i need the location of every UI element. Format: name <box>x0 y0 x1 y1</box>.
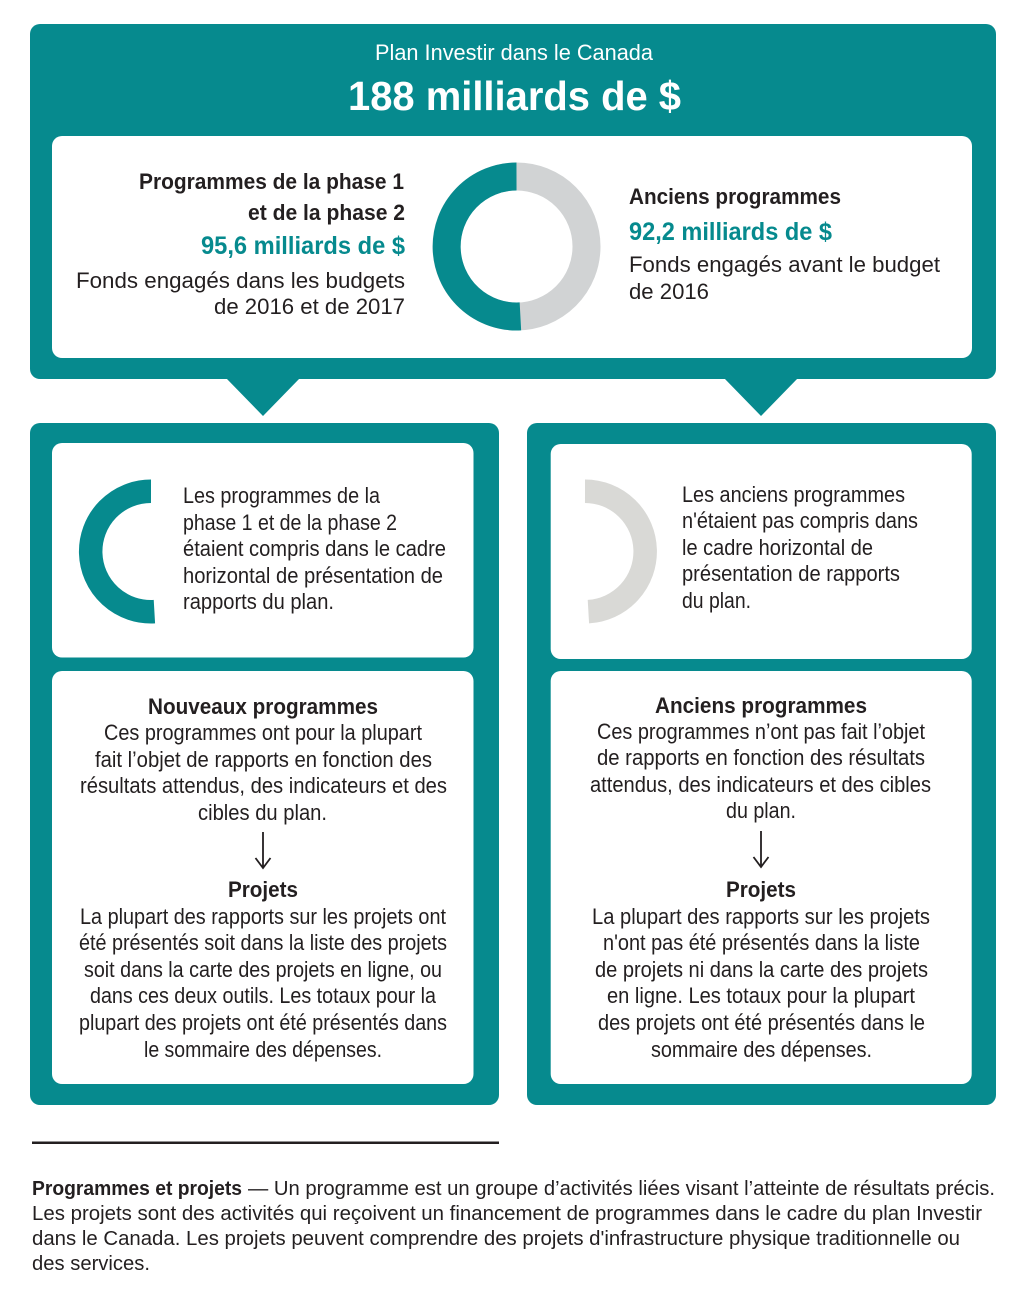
text: framework note <box>682 482 918 613</box>
text: framework note: étaient compris dans le cadre <box>183 536 446 561</box>
text: projects: La plupart des rapports sur les projets <box>592 904 930 929</box>
text: legacy funding <box>629 184 940 304</box>
text: projects: La plupart des rapports sur les projets ont <box>80 904 447 929</box>
text: framework note: phase 1 et de la phase 2 <box>183 510 397 535</box>
panel: new programs <box>30 423 499 1105</box>
text: framework note: le cadre horizontal de <box>682 535 873 560</box>
text: legacy funding: Anciens programmes <box>629 184 841 209</box>
text: legacy programs: attendus, des indicateurs et des cibles <box>590 772 931 797</box>
footnote: des services. <box>32 1252 150 1275</box>
text: legacy funding: de 2016 <box>629 279 709 304</box>
text: legacy funding: Fonds engagés avant le budget <box>629 252 940 277</box>
card: legacy programs reporting <box>551 671 972 1084</box>
arrow: down <box>256 832 270 868</box>
card: horizontal framework, legacy programs <box>551 444 972 659</box>
text: phase 1 and 2 funding: 95,6 milliards de $ <box>201 232 405 260</box>
text: phase 1 and 2 funding: et de la phase 2 <box>248 200 405 225</box>
text: legacy programs: du plan. <box>726 798 796 823</box>
text: framework note: présentation de rapports <box>682 561 900 586</box>
text: phase 1 and 2 funding <box>76 169 405 319</box>
text: phase 1 and 2 funding: de 2016 et de 2017 <box>214 294 405 319</box>
arrow: down <box>754 831 768 867</box>
text: projects: n'ont pas été présentés dans la liste <box>603 930 920 955</box>
text: legacy programs: Anciens programmes <box>655 693 867 718</box>
subtitle: Plan Investir dans le Canada <box>375 40 654 65</box>
text: phase 1 and 2 funding: Fonds engagés dans les budgets <box>76 268 405 293</box>
text: projects: Projets <box>228 877 298 902</box>
text: framework note: du plan. <box>682 588 751 613</box>
card: horizontal framework, new programs <box>52 443 474 658</box>
text: projects: soit dans la carte des projets en ligne, ou <box>84 957 442 982</box>
text: projects: Projets <box>726 877 796 902</box>
text: projects: plupart des projets ont été présentés dans <box>79 1010 447 1035</box>
panel: legacy programs <box>527 423 996 1105</box>
icon: teal half ring <box>91 491 154 612</box>
text: projects <box>592 877 930 1062</box>
text: framework note: rapports du plan. <box>183 589 334 614</box>
text: projects: dans ces deux outils. Les totaux pour la <box>90 983 436 1008</box>
icon: grey half ring <box>585 491 645 612</box>
text: legacy programs: de rapports en fonction des résultats <box>597 745 925 770</box>
card: new programs reporting <box>52 671 474 1084</box>
text: new programs: cibles du plan. <box>198 800 327 825</box>
donut chart <box>446 176 586 316</box>
panel: plan total <box>30 24 996 416</box>
text: projects: le sommaire des dépenses. <box>144 1037 382 1062</box>
text: projects <box>79 877 447 1062</box>
text: new programs: fait l’objet de rapports en fonction des <box>95 747 432 772</box>
footnote: dans le Canada. Les projets peuvent comprendre des projets d'infrastructure physique traditionnelle ou <box>32 1227 960 1250</box>
text: framework note: n'étaient pas compris dans <box>682 508 918 533</box>
text: phase 1 and 2 funding: Programmes de la phase 1 <box>139 169 404 194</box>
text: framework note: Les programmes de la <box>183 483 380 508</box>
text: legacy programs <box>590 693 931 823</box>
text: projects: sommaire des dépenses. <box>651 1037 872 1062</box>
text: legacy programs: Ces programmes n’ont pas fait l’objet <box>597 719 926 744</box>
text: projects: des projets ont été présentés dans le <box>598 1010 925 1035</box>
footnote: — Un programme est un groupe d’activités liées visant l’atteinte de résultats précis. <box>248 1177 995 1200</box>
panel: breakdown card <box>52 136 972 358</box>
text: new programs <box>80 694 447 825</box>
text: projects: été présentés soit dans la liste des projets <box>79 930 447 955</box>
text: new programs: Nouveaux programmes <box>148 694 378 719</box>
text: framework note: horizontal de présentation de <box>183 563 443 588</box>
footnote: Programmes et projets <box>32 1177 242 1200</box>
arrow: to new programs <box>226 378 300 416</box>
text: projects: de projets ni dans la carte des projets <box>595 957 928 982</box>
text: new programs: Ces programmes ont pour la plupart <box>104 720 423 745</box>
text: framework note <box>183 483 446 614</box>
text: framework note: Les anciens programmes <box>682 482 905 507</box>
text: new programs: résultats attendus, des indicateurs et des <box>80 773 447 798</box>
footnote: Les projets sont des activités qui reçoivent un financement de programmes dans le cadre du plan Investir <box>32 1202 982 1225</box>
text: legacy funding: 92,2 milliards de $ <box>629 218 832 246</box>
title: 188 milliards de $ <box>348 73 681 119</box>
arrow: to old programs <box>724 378 798 416</box>
text: projects: en ligne. Les totaux pour la plupart <box>607 983 916 1008</box>
footnote <box>32 1177 995 1275</box>
divider rule <box>32 1142 499 1144</box>
